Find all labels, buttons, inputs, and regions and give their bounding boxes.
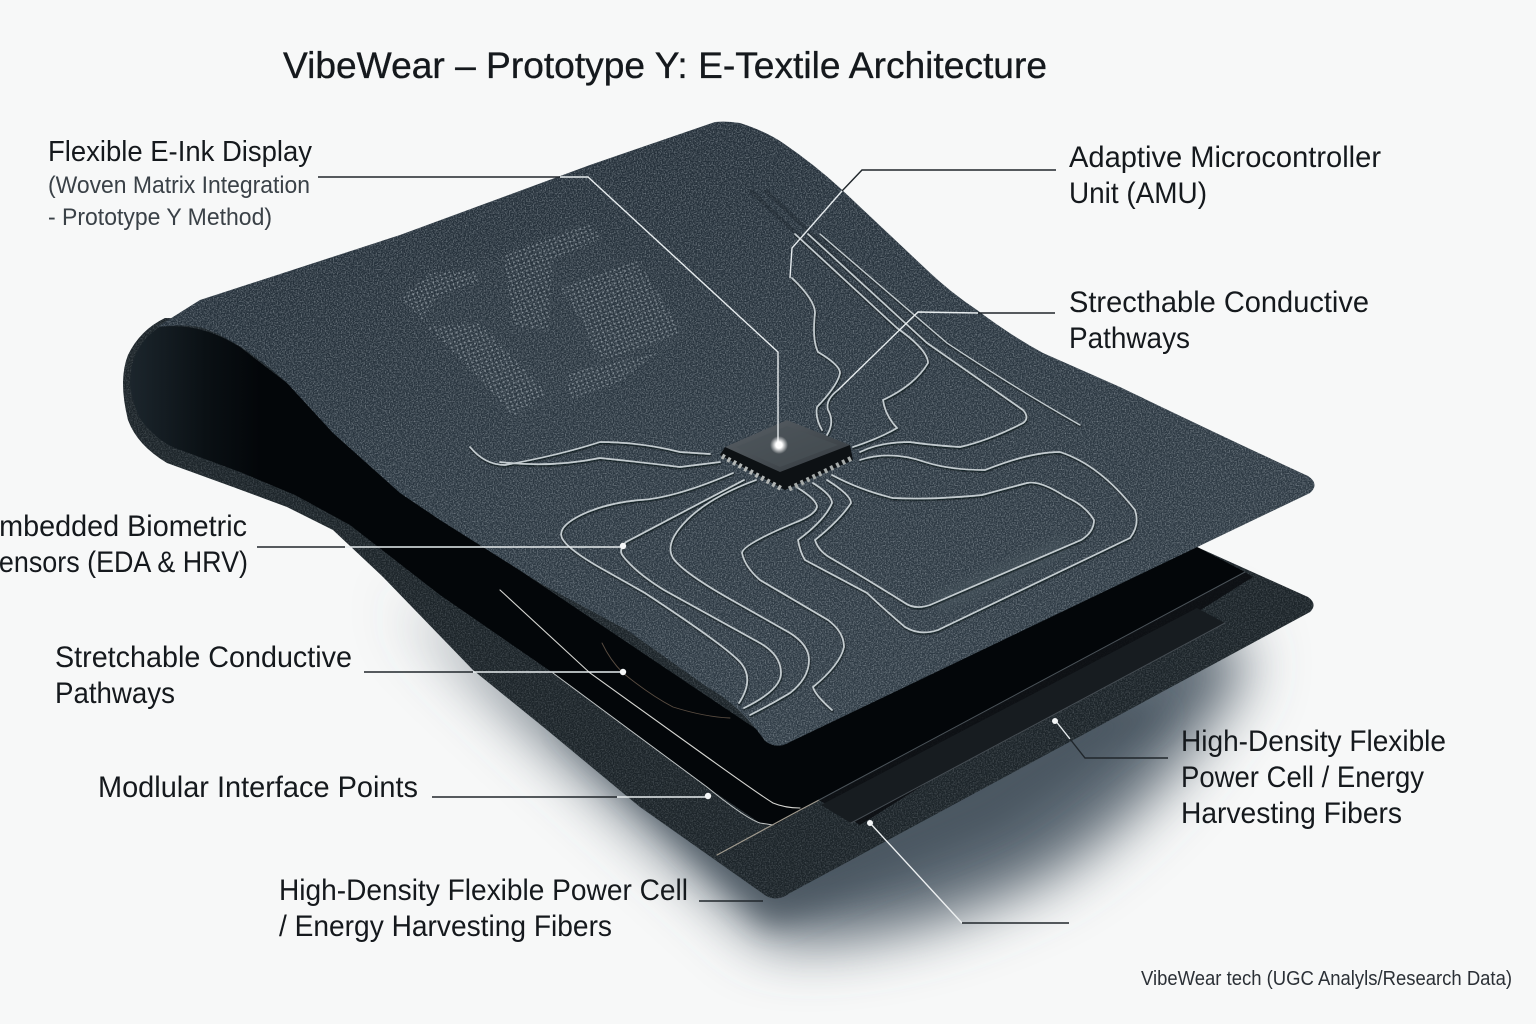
leader: power cell left xyxy=(699,900,763,902)
label: power cell right: Harvesting Fibers xyxy=(1181,797,1402,830)
power strip inside trace loop xyxy=(925,535,1072,613)
lower layer fine traces xyxy=(500,572,1245,855)
leader: stretchable pathways upper xyxy=(838,312,1055,390)
faint display field xyxy=(400,222,690,420)
label: power cell left xyxy=(279,874,688,943)
leader: embedded sensors xyxy=(257,543,626,549)
label: power cell left: / Energy Harvesting Fibers xyxy=(279,910,612,943)
leader: flexible e-ink display xyxy=(318,177,778,445)
chip lid xyxy=(725,420,850,472)
label: flexible e-ink display: Flexible E-Ink Display xyxy=(48,136,312,168)
leader: power cell right xyxy=(1052,718,1168,758)
title: VibeWear – Prototype Y: E-Textile Architecture xyxy=(283,45,1047,86)
label: flexible e-ink display: (Woven Matrix Integration xyxy=(48,172,310,199)
bundle grooves xyxy=(750,190,927,343)
upper sheet woven texture xyxy=(150,110,1330,760)
upper sheet surface xyxy=(157,122,1315,746)
leader: stretchable pathways lower xyxy=(364,669,626,675)
label: stretchable conductive pathways lower xyxy=(55,641,352,710)
chip body xyxy=(720,445,853,490)
dark band along lower sheet xyxy=(819,572,1253,825)
label: adaptive microcontroller unit xyxy=(1069,141,1381,210)
microcontroller chip xyxy=(720,420,853,490)
cast shadow under textile xyxy=(400,600,1250,941)
label: adaptive microcontroller unit: Unit (AMU) xyxy=(1069,177,1207,210)
label: flexible e-ink display xyxy=(48,136,312,231)
lower sheet woven texture xyxy=(123,318,1313,898)
label: embedded biometric sensors xyxy=(0,510,248,579)
inset power strip on lower sheet xyxy=(821,608,1225,823)
label: stretchable conductive pathways lower: Pathways xyxy=(55,677,175,710)
label: stretchable conductive pathways upper xyxy=(1069,286,1369,355)
label: power cell right: Power Cell / Energy xyxy=(1181,761,1424,794)
display glyph blocks xyxy=(400,223,680,416)
e-ink dot matrix display xyxy=(400,222,690,420)
leader: modular interface points xyxy=(432,793,711,799)
label: modular interface points: Modlular Interface Points xyxy=(98,771,418,804)
chip pins xyxy=(722,456,782,489)
label: stretchable conductive pathways upper: Strecthable Conductive xyxy=(1069,286,1369,319)
leader: lower unlabeled callout xyxy=(867,820,1069,923)
dark inner cavity xyxy=(130,326,1245,825)
chip indicator light xyxy=(770,436,788,454)
label: flexible e-ink display: - Prototype Y Method) xyxy=(48,204,272,231)
e-textile sheet xyxy=(100,110,1340,920)
label: adaptive microcontroller unit: Adaptive Microcontroller xyxy=(1069,141,1381,174)
source note: VibeWear tech (UGC Analyls/Research Data) xyxy=(1141,968,1512,990)
label: power cell left: High-Density Flexible Power Cell xyxy=(279,874,688,907)
label: power cell right xyxy=(1181,725,1446,830)
label: stretchable conductive pathways upper: Pathways xyxy=(1069,322,1190,355)
stretchable conductive traces xyxy=(470,234,1137,715)
lower sheet and fold underside xyxy=(123,318,1314,898)
label: stretchable conductive pathways lower: Stretchable Conductive xyxy=(55,641,352,674)
leader: adaptive microcontroller xyxy=(790,170,1056,278)
label: power cell right: High-Density Flexible xyxy=(1181,725,1446,758)
